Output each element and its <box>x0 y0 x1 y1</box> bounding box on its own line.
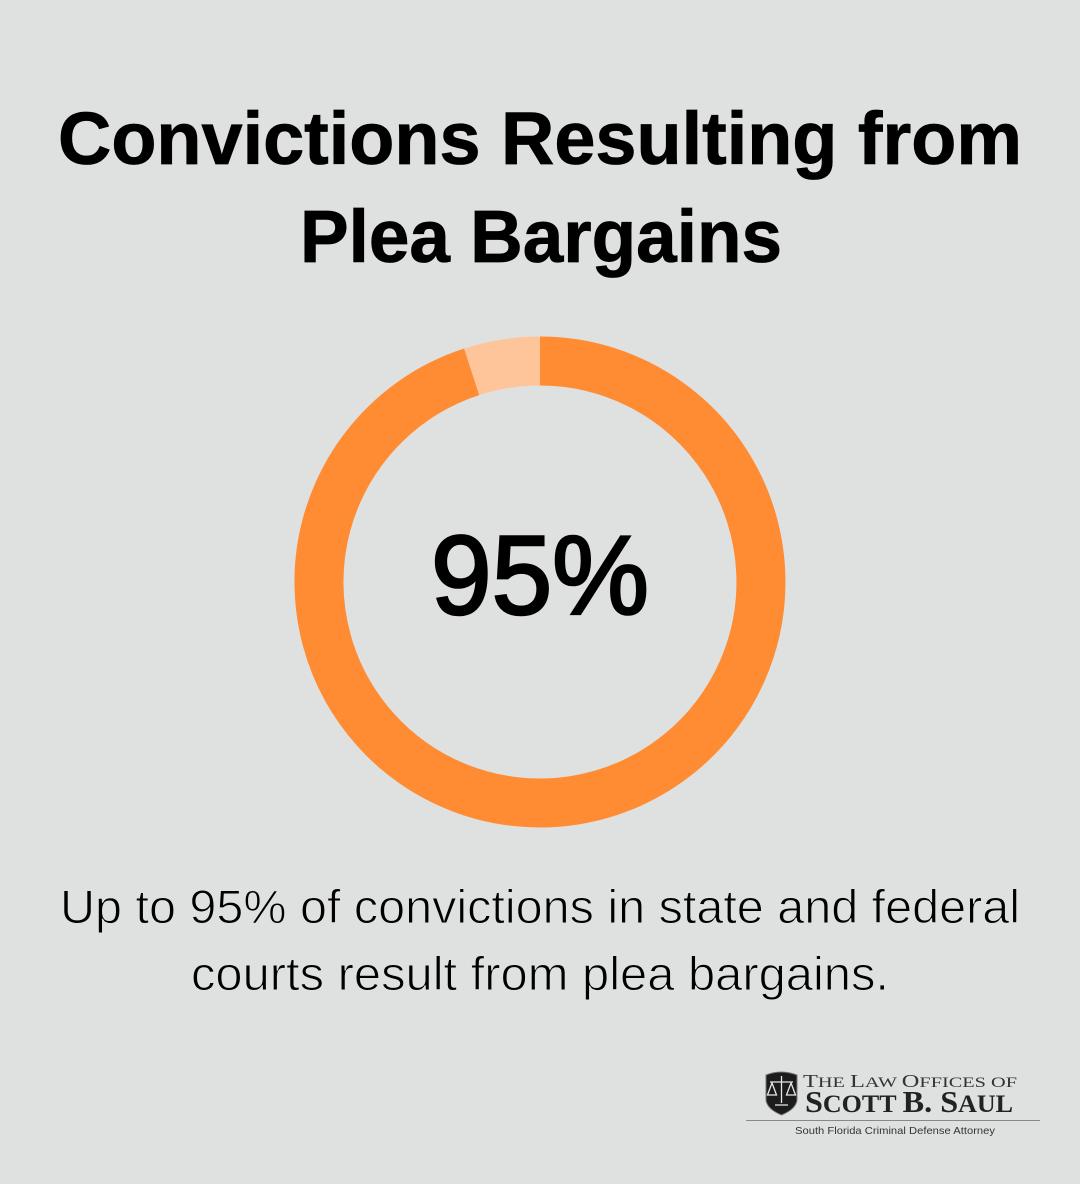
ring segment: 95% share <box>319 361 761 803</box>
title: Convictions Resulting from <box>58 97 1022 180</box>
description text: courts result from plea bargains. <box>191 947 889 1000</box>
logo attorney name: SCOTT B. SAUL <box>805 1084 1013 1119</box>
ring segment: remaining 5% <box>472 361 540 372</box>
logo: law offices <box>746 1071 1040 1137</box>
logo tagline: South Florida Criminal Defense Attorney <box>795 1125 996 1137</box>
logo firm name: T HE L AW O FFICES OF <box>803 1071 1017 1091</box>
center value: 95% <box>431 513 649 638</box>
description text: Up to 95% of convictions in state and federal <box>60 880 1020 933</box>
donut chart: 95% <box>319 361 761 803</box>
title: Plea Bargains <box>300 195 782 278</box>
title <box>58 97 1022 278</box>
description text <box>60 880 1020 1000</box>
icon: shield with scales <box>766 1072 797 1115</box>
